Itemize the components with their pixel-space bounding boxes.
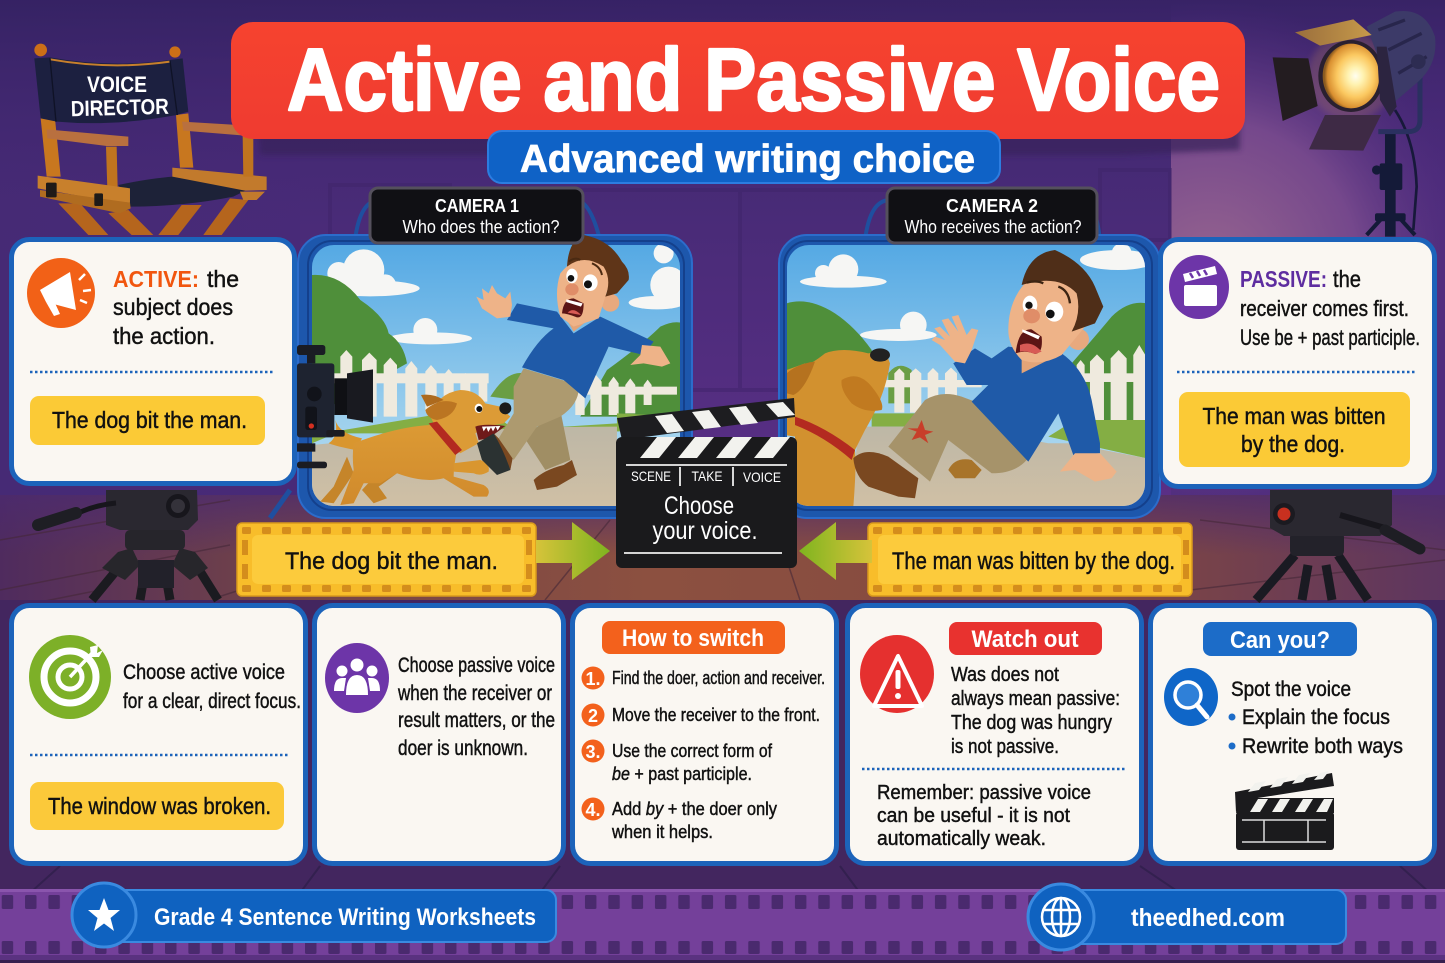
panel: choose active voice bbox=[12, 606, 306, 864]
icon: people bbox=[325, 643, 389, 713]
choose active text: Choose active voice bbox=[123, 661, 285, 684]
filmstrip: passive sentence bbox=[868, 523, 1192, 596]
remember text bbox=[877, 782, 1091, 850]
example box bbox=[1179, 392, 1410, 467]
step 1 bbox=[582, 666, 825, 690]
active definition: the action. bbox=[113, 323, 215, 349]
step 1: Find the doer, action and receiver. bbox=[612, 668, 825, 688]
arrow: left to clapperboard bbox=[799, 522, 872, 580]
icon: megaphone bbox=[27, 258, 95, 328]
example box: The dog bit the man. bbox=[52, 407, 247, 433]
step 4 bbox=[582, 798, 777, 842]
man head, camera 1 bbox=[557, 235, 629, 332]
clapperboard bbox=[616, 398, 797, 568]
step 4: Add by + the doer only bbox=[612, 799, 777, 819]
passive definition bbox=[1240, 266, 1420, 350]
heading bbox=[1203, 622, 1357, 656]
warning text: is not passive. bbox=[951, 736, 1059, 758]
icon: magnifier bbox=[1164, 668, 1218, 726]
monitor: camera 1 bbox=[270, 200, 692, 518]
video camera on stand bbox=[297, 345, 373, 468]
panel: watch out bbox=[848, 606, 1142, 864]
choose active text: for a clear, direct focus. bbox=[123, 690, 301, 713]
camera 1 label: Who does the action? bbox=[402, 216, 560, 237]
film strip footer band bbox=[0, 889, 1445, 963]
footer: website pill bbox=[1028, 884, 1346, 950]
example box bbox=[30, 782, 284, 830]
monitor: camera 2 bbox=[775, 200, 1160, 518]
director chair bbox=[34, 44, 267, 235]
checklist bbox=[1228, 678, 1403, 758]
panel: passive bbox=[1160, 240, 1434, 486]
icon: target bbox=[29, 635, 111, 719]
checklist: Rewrite both ways bbox=[1242, 735, 1403, 758]
footer: worksheets pill bbox=[72, 883, 556, 947]
clapperboard: your voice. bbox=[652, 517, 758, 545]
example box bbox=[30, 396, 265, 445]
scene: dog bites man bbox=[312, 243, 687, 507]
title banner bbox=[231, 22, 1245, 155]
arrow: right to clapperboard bbox=[536, 522, 610, 580]
clapperboard: TAKE bbox=[692, 468, 722, 484]
step 3: be + past participle. bbox=[612, 764, 752, 784]
heading: Can you? bbox=[1230, 627, 1330, 654]
camera 2 label: Who receives the action? bbox=[904, 216, 1082, 237]
choose passive text: Choose passive voice bbox=[398, 654, 555, 677]
step 3: Use the correct form of bbox=[612, 741, 773, 761]
panel: how to switch bbox=[572, 606, 836, 864]
choose passive text: doer is unknown. bbox=[398, 737, 528, 760]
step 2: Move the receiver to the front. bbox=[612, 705, 820, 725]
spotlight bbox=[1273, 11, 1435, 237]
passive definition: the bbox=[1333, 266, 1361, 292]
checklist: Spot the voice bbox=[1231, 678, 1351, 701]
chair label bbox=[70, 72, 169, 121]
step 4: 4. bbox=[585, 800, 601, 820]
passive definition: receiver comes first. bbox=[1240, 296, 1409, 321]
remember text: Remember: passive voice bbox=[877, 782, 1091, 804]
step 2: 2 bbox=[588, 706, 598, 726]
active definition: subject does bbox=[113, 294, 233, 320]
example box: by the dog. bbox=[1241, 431, 1345, 457]
warning text bbox=[951, 664, 1120, 758]
clapperboard: Choose bbox=[664, 492, 734, 520]
camera 1 label: CAMERA 1 bbox=[435, 196, 519, 216]
active definition: ACTIVE: bbox=[113, 266, 199, 292]
camera 2 label: CAMERA 2 bbox=[946, 196, 1038, 216]
step 1: 1. bbox=[585, 669, 601, 689]
checklist: Explain the focus bbox=[1242, 706, 1390, 729]
right camera tripod bbox=[1256, 490, 1420, 600]
choose passive text: result matters, or the bbox=[398, 709, 555, 732]
footer: website pill: theedhed.com bbox=[1131, 904, 1285, 932]
scene: man after bite bbox=[775, 243, 1157, 507]
active definition: the bbox=[207, 266, 239, 292]
step 2 bbox=[582, 704, 820, 726]
step 3 bbox=[582, 740, 773, 784]
panel: can you bbox=[1150, 606, 1434, 864]
panel: active bbox=[12, 240, 294, 484]
subtitle pill: Advanced writing choice bbox=[520, 138, 975, 181]
heading: How to switch bbox=[622, 625, 764, 652]
clapperboard: VOICE bbox=[743, 469, 781, 485]
icon: clapperboard bbox=[1235, 771, 1334, 850]
clapperboard: SCENE bbox=[631, 468, 671, 484]
camera 1 label bbox=[370, 188, 583, 243]
remember text: can be useful - it is not bbox=[877, 805, 1070, 827]
footer: worksheets pill: Grade 4 Sentence Writing Worksheets bbox=[154, 904, 536, 931]
choose passive text: when the receiver or bbox=[397, 682, 552, 705]
example box: The man was bitten bbox=[1202, 403, 1386, 429]
choose passive text bbox=[397, 654, 555, 760]
choose active text bbox=[123, 661, 301, 713]
title banner: Active and Passive Voice bbox=[287, 30, 1220, 129]
step 3: 3. bbox=[585, 742, 601, 762]
chair label: VOICE bbox=[87, 72, 147, 97]
camera 2 label bbox=[887, 188, 1097, 243]
example box: The window was broken. bbox=[48, 793, 271, 819]
warning text: Was does not bbox=[951, 664, 1059, 686]
filmstrip: active sentence bbox=[237, 523, 536, 596]
active definition bbox=[113, 266, 239, 349]
icon: warning bbox=[860, 635, 934, 713]
passive definition: PASSIVE: bbox=[1240, 266, 1327, 292]
warning text: The dog was hungry bbox=[951, 712, 1112, 734]
panel: choose passive voice bbox=[314, 606, 564, 864]
step 4: when it helps. bbox=[611, 822, 713, 842]
icon: clapperboard bbox=[1169, 255, 1229, 319]
remember text: automatically weak. bbox=[877, 828, 1046, 850]
heading: Watch out bbox=[972, 626, 1079, 653]
chair label: DIRECTOR bbox=[70, 94, 169, 121]
heading bbox=[949, 622, 1102, 655]
filmstrip: passive sentence: The man was bitten by the dog. bbox=[892, 548, 1175, 575]
filmstrip: active sentence: The dog bit the man. bbox=[285, 548, 498, 575]
left camera tripod bbox=[38, 490, 218, 600]
warning text: always mean passive: bbox=[951, 688, 1120, 710]
